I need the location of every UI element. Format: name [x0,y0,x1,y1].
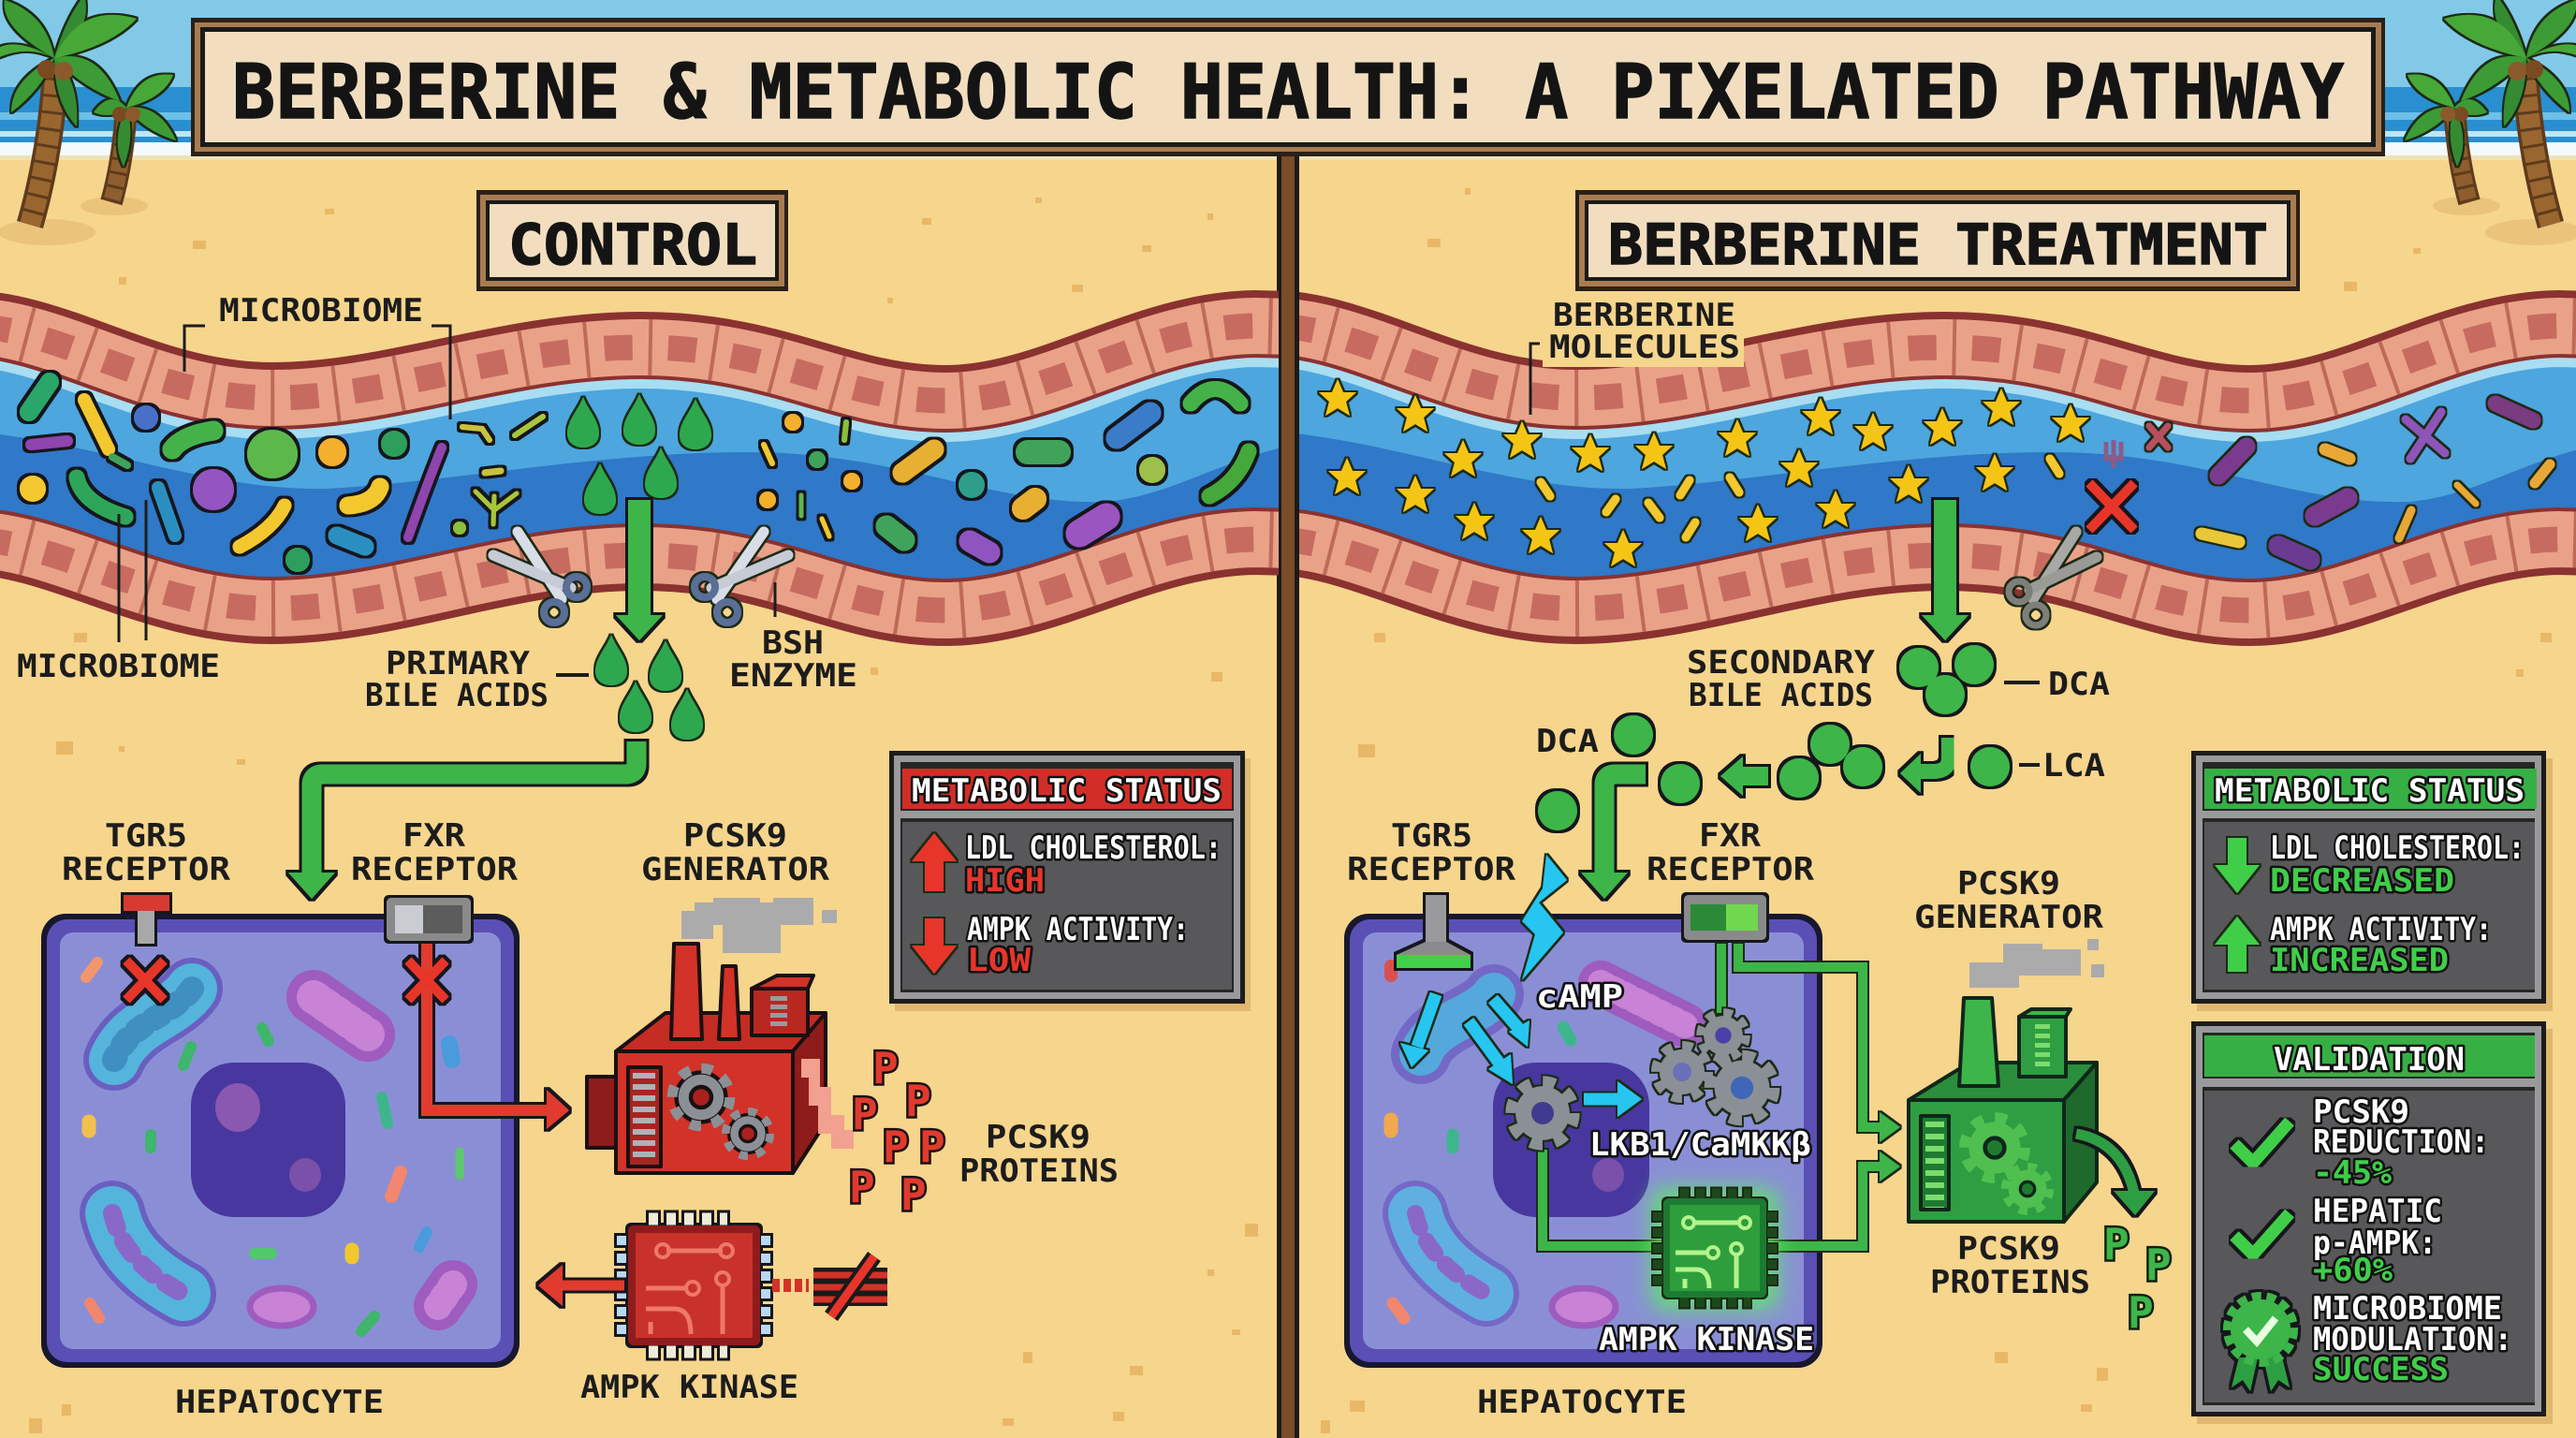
arrow: LDL down [2215,838,2260,893]
label: primary bile acids [365,645,589,714]
icon: berberine star molecules [1319,379,2089,566]
arrow: bile acids to hepatocyte (treatment) [1581,774,1646,899]
labels: control receptors and generator: RECEPTOR [351,851,519,888]
label: berberine molecules: MOLECULES [1549,329,1740,366]
arrow: AMPK down [912,918,957,974]
arrow: lumen to primary bile acids [616,500,663,640]
label: primary bile acids: PRIMARY [386,645,531,682]
icon: PCSK9 proteins (red P markers): P [919,1122,945,1172]
text: PCSK9 reduction: -45% [2313,1154,2393,1192]
label: microbiome top with bracket: MICROBIOME [219,292,423,330]
label: microbiome bottom with lines [17,500,220,685]
label: secondary bile acids [1687,644,1876,714]
label: secondary bile acids: SECONDARY [1687,644,1876,682]
text: microbiome modulation [2313,1290,2512,1388]
label: PCSK9 proteins [959,1119,1119,1190]
arrow: bile acids to hepatocyte [288,741,637,899]
icon: success badge [2227,1296,2294,1391]
arrow: LDL up [912,833,957,891]
panel: treatment hepatocyte [1344,914,1822,1368]
icon: AMPK kinase chip (green, glowing) [1652,1189,1778,1309]
icon: PCSK9 generator factory (green) [1909,939,2104,1222]
mitochondria [250,997,453,1326]
text: hepatic p-AMPK: +60% [2313,1252,2393,1289]
panel: validation: VALIDATION [2274,1041,2465,1078]
icon: primary bile acid droplets [595,635,703,740]
labels: treatment receptors and generator: RECEPTOR [1647,851,1815,888]
label: hepatocyte control: HEPATOCYTE [175,1384,384,1421]
icon: inactive scissors [2009,532,2097,625]
label: berberine molecules: BERBERINE [1553,297,1735,334]
smoke [681,898,837,953]
icon: bile acid droplets in lumen [567,394,711,514]
label: DCA: DCA [2048,666,2110,703]
text: hepatic p-AMPK: p-AMPK: [2313,1225,2437,1262]
panel: metabolic status treatment: INCREASED [2270,942,2449,979]
text: microbiome modulation: MODULATION: [2313,1321,2512,1358]
labels: treatment receptors and generator: FXR [1699,817,1762,855]
bacteria: control microbiome [20,382,1249,572]
panel: metabolic status treatment: AMPK ACTIVITY: [2270,911,2492,948]
text: PCSK9 reduction [2313,1093,2489,1192]
icon: PCSK9 generator factory (red) [587,898,854,1173]
labels: treatment receptors and generator: RECEPTOR [1347,851,1516,888]
label: microbiome bottom with lines: MICROBIOME [17,648,220,685]
label: hepatocyte treatment: HEPATOCYTE [1477,1384,1687,1421]
icon: PCSK9 proteins (red P markers): P [883,1122,909,1172]
smoke [1969,939,2104,988]
labels: control receptors and generator: PCSK9 [683,817,787,855]
arrow: AMPK up [2215,917,2260,972]
label: AMPK kinase control: AMPK KINASE [580,1369,798,1406]
icon: check 1 [2234,1122,2290,1163]
label: DCA second: DCA [1536,723,1599,760]
icon: PCSK9 proteins (green P markers): P [2128,1287,2154,1338]
icon: PCSK9 proteins (green P markers): P [2103,1219,2130,1269]
labels: control receptors and generator: TGR5 [105,817,187,855]
icon: secondary bile acid cluster [1899,645,1994,714]
icon: PCSK9 proteins (red P markers): P [872,1043,899,1093]
panel: metabolic status treatment: METABOLIC STATUS [2215,772,2525,810]
labels: treatment receptors and generator: TGR5 [1391,817,1472,855]
panel: metabolic status control: HIGH [965,862,1045,900]
panel: metabolic status treatment: LDL CHOLESTEROL: [2270,829,2525,867]
label: PCSK9 proteins: PROTEINS [959,1152,1119,1190]
label: secondary bile acids: BILE ACIDS [1689,677,1873,714]
endoplasmic reticulum [112,989,192,1294]
icon: FXR receptor active [1684,895,1766,940]
panel: control intestine [0,324,1329,612]
icon: BSH scissors (right) [695,532,788,623]
bacteria: treatment disrupted microbiome [1541,404,2550,560]
icon: gears cluster LKB1 CaMKKb [1511,1013,1774,1145]
arrow: curved conversion [1900,738,1949,793]
panel: metabolic status control: LOW [967,942,1032,979]
nucleus [191,1063,345,1217]
arrow: AMPK output (red) [538,1265,624,1306]
organelles [1391,966,1685,1326]
icon: TGR5 receptor active [1397,895,1471,968]
panel: metabolic status treatment: DECREASED [2270,862,2454,900]
label: BSH enzyme: ENZYME [729,657,857,695]
icon: TGR5 receptor blocked [124,895,169,1000]
label: BSH enzyme: BSH [762,624,824,662]
panel: metabolic status treatment [2191,751,2553,1011]
label: microbiome top with bracket [184,292,450,419]
icon: right palm trees [2405,0,2576,245]
nucleus [1493,1063,1649,1217]
icon: bile acid molecules path [1538,715,2010,830]
heading: berberine treatment: BERBERINE TREATMENT [1608,213,2268,278]
text: PCSK9 reduction: PCSK9 [2313,1093,2409,1131]
text: hepatic p-AMPK: HEPATIC [2313,1193,2442,1230]
heading: control [476,190,788,291]
panel: metabolic status control: LDL CHOLESTEROL: [965,829,1222,867]
icon: PCSK9 proteins (red P markers): P [900,1169,927,1220]
label: BSH enzyme [729,582,857,695]
icon: PCSK9 proteins (red P markers) [849,1043,945,1220]
panel: validation [2191,1021,2553,1424]
panel: treatment intestine [1266,324,2576,612]
arrow: lumen to secondary bile acids [1922,500,1969,640]
text: microbiome modulation: MICROBIOME [2313,1290,2502,1328]
title banner: BERBERINE & METABOLIC HEALTH: A PIXELATED PATHWAY [232,49,2344,136]
icon: PCSK9 proteins (green P markers): P [2145,1240,2172,1290]
organelle specks [86,962,460,1331]
labels: treatment receptors and generator [1347,817,2104,936]
label: PCSK9 proteins treatment [1930,1230,2090,1301]
title banner [191,18,2385,156]
centre divider [1277,150,1299,1438]
panel: metabolic status control: METABOLIC STATUS [912,772,1222,810]
icon: PCSK9 proteins (green P markers) [2103,1219,2172,1338]
icon: AMPK kinase chip (red) [622,1219,766,1352]
icon: PCSK9 proteins (red P markers): P [849,1162,875,1212]
arrows: green signal paths [1543,944,1900,1246]
label: PCSK9 proteins: PCSK9 [986,1119,1090,1156]
label: PCSK9 proteins treatment: PROTEINS [1930,1264,2090,1301]
text: PCSK9 reduction: REDUCTION: [2313,1123,2489,1161]
label: cAMP: cAMP [1536,978,1623,1016]
icon: PCSK9 proteins (red P markers): P [852,1089,878,1139]
label: LCA: LCA [2042,747,2105,785]
text: microbiome modulation: SUCCESS [2313,1351,2449,1388]
icon: FXR receptor inactive and red signal [387,898,569,1129]
icon: check 2 [2234,1213,2290,1255]
labels: treatment receptors and generator: PCSK9 [1957,865,2060,902]
text: hepatic p-AMPK [2313,1193,2442,1289]
icon: red X over scissors [2089,483,2134,530]
arrow: factory output curve [2076,1134,2155,1215]
heading: control: CONTROL [508,213,757,278]
arrow: left between molecules [1720,756,1768,796]
label: LCA [2019,747,2105,785]
label: PCSK9 proteins treatment: PCSK9 [1957,1230,2060,1268]
label: primary bile acids: BILE ACIDS [365,677,549,714]
panel: metabolic status control: AMPK ACTIVITY: [967,911,1189,948]
label: LKB1/CaMKKb: LKB1/CaMKKβ [1589,1126,1811,1164]
icon: cyan lightning bolt and arrows [1400,855,1642,1117]
icon: PCSK9 proteins (red P markers): P [905,1076,931,1126]
labels: control receptors and generator: GENERATOR [641,851,830,888]
heading: berberine treatment [1575,190,2300,291]
label: DCA [2004,666,2110,703]
icon: BSH scissors (left) [493,532,587,623]
icon: left palm trees [0,0,176,245]
labels: control receptors and generator: RECEPTOR [62,851,231,888]
label: AMPK kinase treatment: AMPK KINASE [1599,1321,1814,1358]
panel: control hepatocyte [41,914,520,1368]
icon: debris fragments [2106,440,2121,468]
panel: metabolic status control [889,751,1251,1011]
label: berberine molecules [1530,297,1744,415]
labels: control receptors and generator [62,817,830,888]
labels: treatment receptors and generator: GENERATOR [1914,899,2104,936]
icon: blocked input [772,1256,887,1316]
labels: control receptors and generator: FXR [402,817,466,855]
